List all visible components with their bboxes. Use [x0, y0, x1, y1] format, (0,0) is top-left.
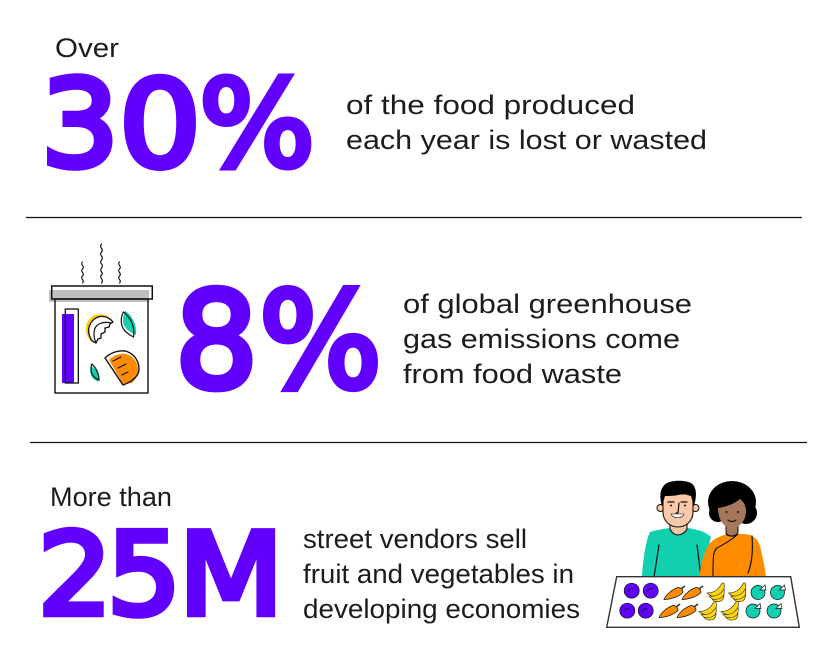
steam	[82, 244, 120, 283]
man	[642, 481, 711, 577]
green leaves	[123, 311, 136, 335]
text: greenhouse gas emissions: of global greenhouse	[403, 289, 692, 319]
produce: bananas	[699, 583, 746, 620]
text: greenhouse gas emissions: from food waste	[403, 359, 622, 389]
text: street vendors: fruit and vegetables in	[303, 559, 574, 589]
text: greenhouse gas emissions: gas emissions come	[403, 324, 680, 354]
text: street vendors: street vendors sell	[303, 524, 527, 554]
section: 8 percent of emissions	[49, 244, 700, 419]
label: Over: Over	[55, 33, 119, 63]
illustration: two vendors at a produce stall	[607, 481, 799, 627]
big number: 30%: %	[199, 56, 315, 195]
yellow peel	[86, 314, 113, 342]
produce: green apples	[746, 585, 786, 618]
orange slice	[109, 354, 138, 384]
produce: carrots	[659, 586, 703, 618]
text: food lost or wasted: each year is lost or wasted	[346, 125, 707, 155]
text: food lost or wasted: of the food produced	[346, 90, 635, 120]
big number: 25M: 2	[38, 509, 112, 641]
icon: compost bin with steam	[49, 244, 152, 393]
text: street vendors: developing economies	[303, 594, 580, 624]
big number: 8%	[175, 265, 382, 419]
big number: 8%: %	[259, 265, 382, 419]
produce: purple onions	[620, 583, 658, 618]
big number: 25M: 5	[107, 509, 181, 641]
woman	[699, 481, 766, 577]
big number: 25M: M	[178, 509, 284, 641]
section: 30 percent of food lost or wasted	[41, 33, 707, 195]
section: 25 million street vendors	[38, 481, 799, 641]
big number: 8%: 8	[175, 265, 258, 419]
big number: 30%	[41, 56, 315, 195]
label: More than: More than	[50, 482, 172, 512]
big number: 30%: 3	[41, 56, 119, 195]
stall table	[607, 577, 799, 627]
bin lid	[49, 290, 149, 302]
bin body	[55, 299, 148, 393]
big number: 25M	[38, 509, 284, 641]
big number: 30%: 0	[119, 56, 201, 195]
